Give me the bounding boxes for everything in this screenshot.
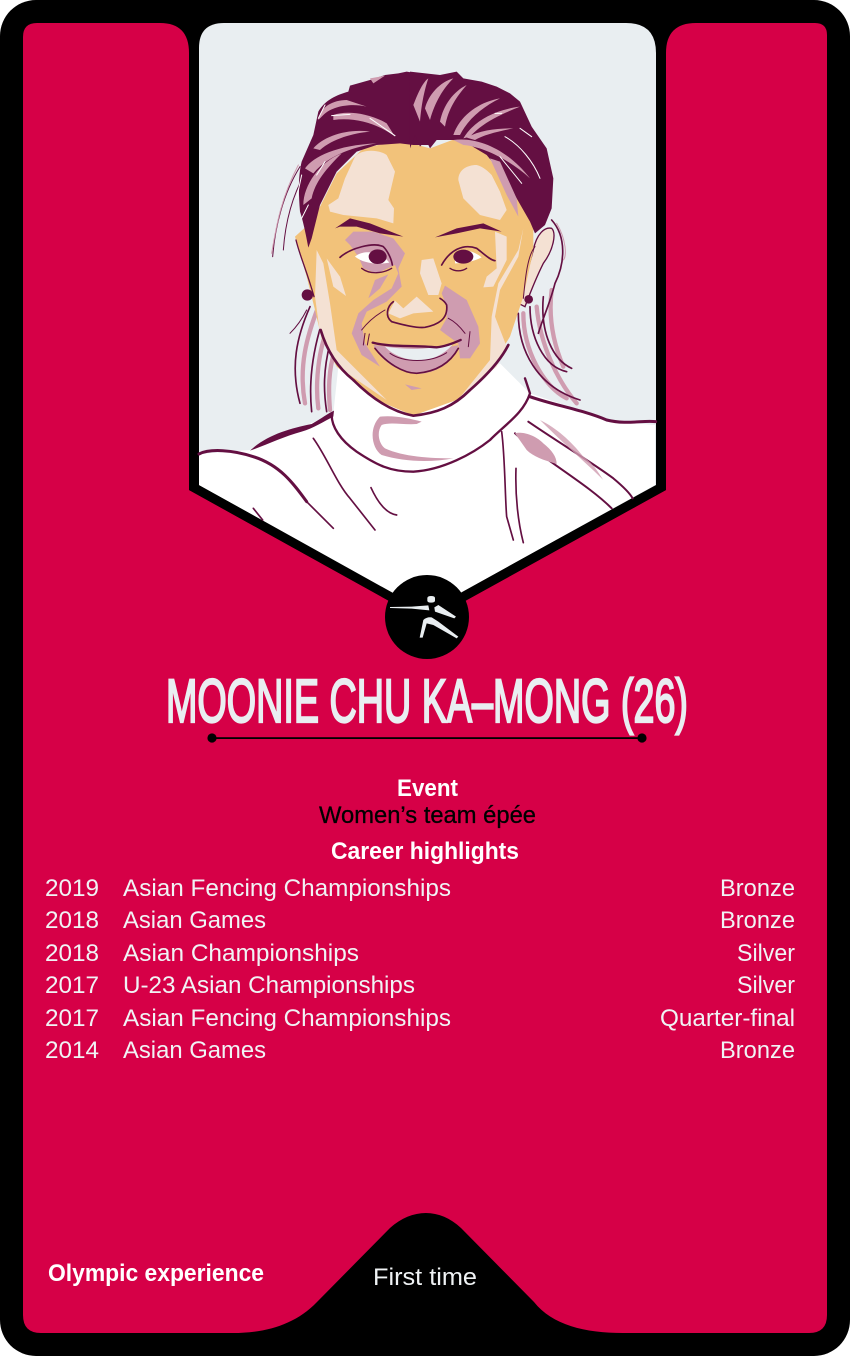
career highlights table [45,875,795,1064]
row 4: 2017 [45,972,99,999]
face shadows [345,232,480,390]
career highlights heading: Career highlights [331,838,519,865]
face highlights [315,151,523,400]
row 5: Asian Fencing Championships [123,1005,451,1032]
row 6: Asian Games [123,1037,266,1064]
right eye [455,251,482,263]
left hair highlights [303,76,395,205]
lips [373,340,461,347]
left eye [355,252,389,264]
row 6 [45,1037,795,1064]
row 3: 2018 [45,940,99,967]
sport badge [385,575,469,659]
jaw outline [296,240,535,416]
row 4: Silver [737,972,795,999]
ear [518,228,554,307]
white jacket [199,363,656,612]
row 5: Quarter-final [660,1005,795,1032]
event value: Women’s team épée [319,802,536,829]
row 6: Bronze [720,1037,795,1064]
portrait frame [189,20,666,622]
row 1: Asian Fencing Championships [123,875,451,902]
row 1: Bronze [720,875,795,902]
cheek creases [362,310,470,347]
portrait illustration [199,23,656,612]
name underline [207,733,647,743]
row 4 [45,972,795,999]
row 2: Bronze [720,907,795,934]
eyebrows [335,218,403,237]
nose [387,298,447,328]
row 3 [45,940,795,967]
row 3: Asian Championships [123,940,359,967]
row 2 [45,907,795,934]
face skin [295,138,533,416]
row 1: 2019 [45,875,99,902]
back hair strands [272,165,580,412]
row 2: 2018 [45,907,99,934]
face and hair [295,72,554,416]
left earring [302,289,313,301]
row 5: 2017 [45,1005,99,1032]
row 6: 2014 [45,1037,99,1064]
teeth [385,343,453,361]
olympic experience value: First time [373,1264,477,1291]
row 3: Silver [737,940,795,967]
olympic experience label: Olympic experience [48,1260,264,1287]
row 4: U-23 Asian Championships [123,972,415,999]
right earring [524,295,533,304]
row 2: Asian Games [123,907,266,934]
portrait background [199,23,656,611]
icon: fencer [390,596,458,638]
facial features [340,245,495,373]
hair mass right [410,72,553,233]
row 1 [45,875,795,902]
right hair highlights [413,78,530,217]
hair mass left [297,72,430,248]
row 5 [45,1005,795,1032]
event label: Event [397,775,458,802]
